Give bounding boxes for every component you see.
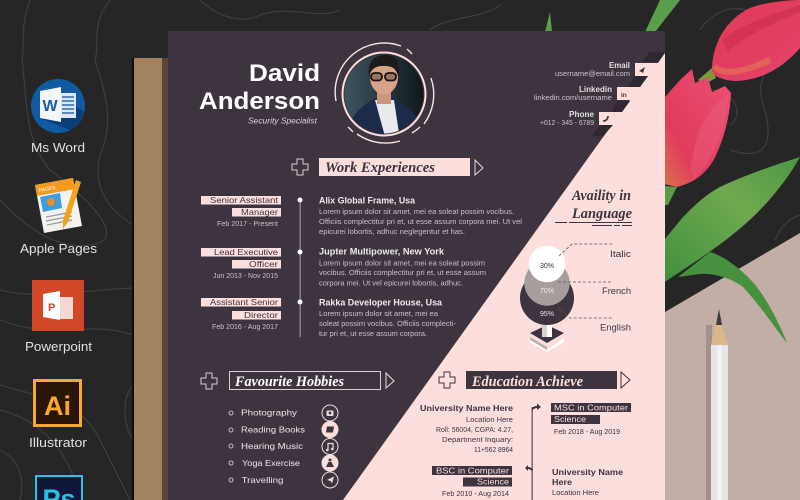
experience 1 details bbox=[319, 196, 522, 236]
hobbies list: Reading Books bbox=[241, 424, 305, 434]
name and job title: David bbox=[249, 60, 320, 87]
education: university right: Location Here bbox=[552, 490, 599, 497]
pink diagonal panel bbox=[343, 53, 665, 500]
heading: favourite hobbies: Favourite Hobbies bbox=[234, 374, 344, 390]
education: bsc degree: Feb 2010 - Aug 2014 bbox=[442, 491, 509, 498]
french circle: 70% bbox=[540, 288, 554, 295]
icon: ms word bbox=[31, 79, 85, 133]
icon: apple pages bbox=[35, 178, 82, 233]
experience 1 details: Lorem ipsum dolor sit amet, mei ea soleat possim vocibus. bbox=[319, 209, 514, 216]
education: university left: Location Here bbox=[466, 417, 513, 424]
experience 1 role: Senior Assistant bbox=[210, 195, 279, 205]
tulips and leaves bbox=[545, 0, 800, 343]
education: msc degree: Science bbox=[554, 414, 586, 424]
experience 3 role: Assistant Senior bbox=[210, 297, 278, 307]
icon: music bbox=[322, 438, 338, 454]
education: university left: University Name Here bbox=[420, 403, 513, 413]
education: university left bbox=[420, 403, 513, 454]
hobbies list bbox=[229, 405, 338, 488]
timeline bbox=[298, 198, 302, 337]
contact: email: Email bbox=[609, 60, 630, 70]
experience 2 role: Officer bbox=[249, 259, 278, 269]
icon: illustrator bbox=[34, 380, 80, 426]
icon: ms word: W bbox=[42, 98, 58, 115]
resume sheet bbox=[168, 31, 665, 500]
education: bsc degree: Science bbox=[477, 476, 509, 486]
education: university right: University Name bbox=[552, 467, 623, 477]
name and job title: Security Specialist bbox=[248, 116, 318, 126]
experience 3 details: Lorem ipsum dolor sit amet, mei ea bbox=[319, 311, 438, 318]
name and job title: Anderson bbox=[199, 88, 320, 115]
experience 2 details bbox=[319, 246, 486, 288]
contact: phone: Phone bbox=[569, 109, 594, 119]
experience 1 details: Officiis complectitur pri et, ut esse assum corpora mei. Ut vel bbox=[319, 219, 522, 226]
experience 1 role bbox=[201, 195, 281, 228]
language chart: Italic bbox=[610, 249, 632, 259]
portrait with rings bbox=[335, 43, 434, 143]
experience 3 details: Rakka Developer House, Usa bbox=[319, 298, 443, 308]
icon: photoshop bbox=[36, 476, 82, 500]
contact: linkedin bbox=[534, 84, 627, 102]
label: illustrator: Illustrator bbox=[29, 435, 88, 450]
icon: apple pages: PAGES bbox=[38, 185, 57, 194]
chart base bbox=[530, 322, 564, 352]
education: msc degree: Feb 2018 - Aug 2019 bbox=[554, 429, 620, 436]
contact: phone bbox=[540, 109, 608, 127]
hobbies list: Travelling bbox=[242, 475, 284, 485]
experience 2 details: corpora mei. Ut vel epicurei lobortis, adhuc. bbox=[319, 280, 463, 288]
icon: powerpoint bbox=[32, 280, 84, 331]
experience 2 role: Lead Executive bbox=[214, 247, 278, 257]
experience 2 details: Jupter Multipower, New York bbox=[319, 246, 445, 256]
heading: favourite hobbies bbox=[201, 372, 394, 390]
english circle: 95% bbox=[540, 311, 554, 318]
education: university right: Here bbox=[552, 477, 572, 487]
contact: phone: +012 - 345 - 6789 bbox=[540, 120, 594, 127]
heading: education achieve bbox=[439, 371, 630, 390]
experience 1 details: epicurei lobortis, adhuc neglegentur et has. bbox=[319, 229, 465, 236]
experience 2 role: Jun 2013 - Nov 2015 bbox=[213, 273, 278, 280]
education: msc degree bbox=[551, 402, 631, 436]
education: connector with arrows bbox=[525, 404, 541, 500]
label: powerpoint: Powerpoint bbox=[25, 339, 92, 354]
heading: education achieve: Education Achieve bbox=[471, 374, 584, 390]
heading: availity in language: Availity in bbox=[571, 188, 631, 204]
experience 3 details bbox=[319, 298, 457, 338]
education: university left: 11+562 8964 bbox=[474, 447, 513, 454]
experience 3 role bbox=[201, 297, 281, 331]
heading: availity in language bbox=[555, 188, 632, 226]
heading: availity in language: Language bbox=[571, 206, 632, 222]
education: university left: Department Inquary: bbox=[442, 437, 513, 444]
italic circle: 30% bbox=[540, 263, 554, 270]
experience 1 details: Alix Global Frame, Usa bbox=[319, 196, 416, 206]
experience 3 role: Director bbox=[244, 310, 278, 320]
icon: camera bbox=[322, 405, 338, 421]
education: university right bbox=[552, 467, 623, 497]
contact: email: username@email.com bbox=[555, 71, 630, 78]
top tulip bbox=[698, 0, 800, 84]
experience 3 role: Feb 2016 - Aug 2017 bbox=[212, 324, 278, 331]
brown backing sheet bbox=[132, 58, 168, 500]
language chart bbox=[520, 244, 632, 352]
heading: work experiences bbox=[292, 158, 483, 176]
label: apple pages: Apple Pages bbox=[20, 241, 98, 256]
contact: email bbox=[555, 60, 645, 78]
contact: linkedin: in bbox=[621, 92, 627, 99]
label: ms word: Ms Word bbox=[31, 140, 85, 155]
hobbies list: Hearing Music bbox=[241, 441, 304, 451]
experience 1 role: Manager bbox=[241, 207, 278, 217]
tan paper surface bbox=[665, 233, 800, 500]
name and job title bbox=[199, 60, 320, 126]
stepped shadow strips bbox=[592, 52, 665, 136]
icon: illustrator: Ai bbox=[44, 391, 71, 421]
icon: book bbox=[322, 421, 338, 438]
experience 3 details: tur pri et, ut esse assum corpora. bbox=[319, 331, 427, 338]
icon: powerpoint: P bbox=[48, 302, 55, 314]
education: university left: Roll: 56004, CGPA: 4.27, bbox=[436, 427, 513, 434]
education: bsc degree: BSC in Computer bbox=[436, 466, 509, 476]
hobbies list: Photography bbox=[241, 408, 298, 418]
lower tulip bbox=[664, 69, 731, 205]
icon: yoga bbox=[322, 454, 338, 472]
education: msc degree: MSC in Computer bbox=[554, 402, 628, 412]
contact: linkedin: linkedin.com/username bbox=[534, 95, 612, 102]
experience 2 details: Lorem ipsum dolor sit amet, mei ea soleat possim bbox=[319, 260, 485, 268]
contact: linkedin: Linkedin bbox=[579, 84, 612, 94]
experience 3 details: soleat possim vocibus. Officiis complecti- bbox=[319, 321, 457, 328]
pencil bbox=[706, 309, 728, 500]
icon: paper plane bbox=[322, 472, 338, 488]
language chart: French bbox=[602, 286, 631, 296]
hobbies list: Yoga Exercise bbox=[242, 458, 300, 468]
experience 2 role bbox=[201, 247, 281, 280]
leaves bbox=[678, 252, 787, 343]
experience 2 details: vocibus. Officiis complectitur pri et, ut esse assum bbox=[319, 270, 486, 277]
language chart: English bbox=[600, 322, 631, 332]
experience 1 role: Feb 2017 - Present bbox=[217, 221, 278, 228]
heading: work experiences: Work Experiences bbox=[325, 160, 435, 176]
education: bsc degree bbox=[432, 466, 512, 498]
